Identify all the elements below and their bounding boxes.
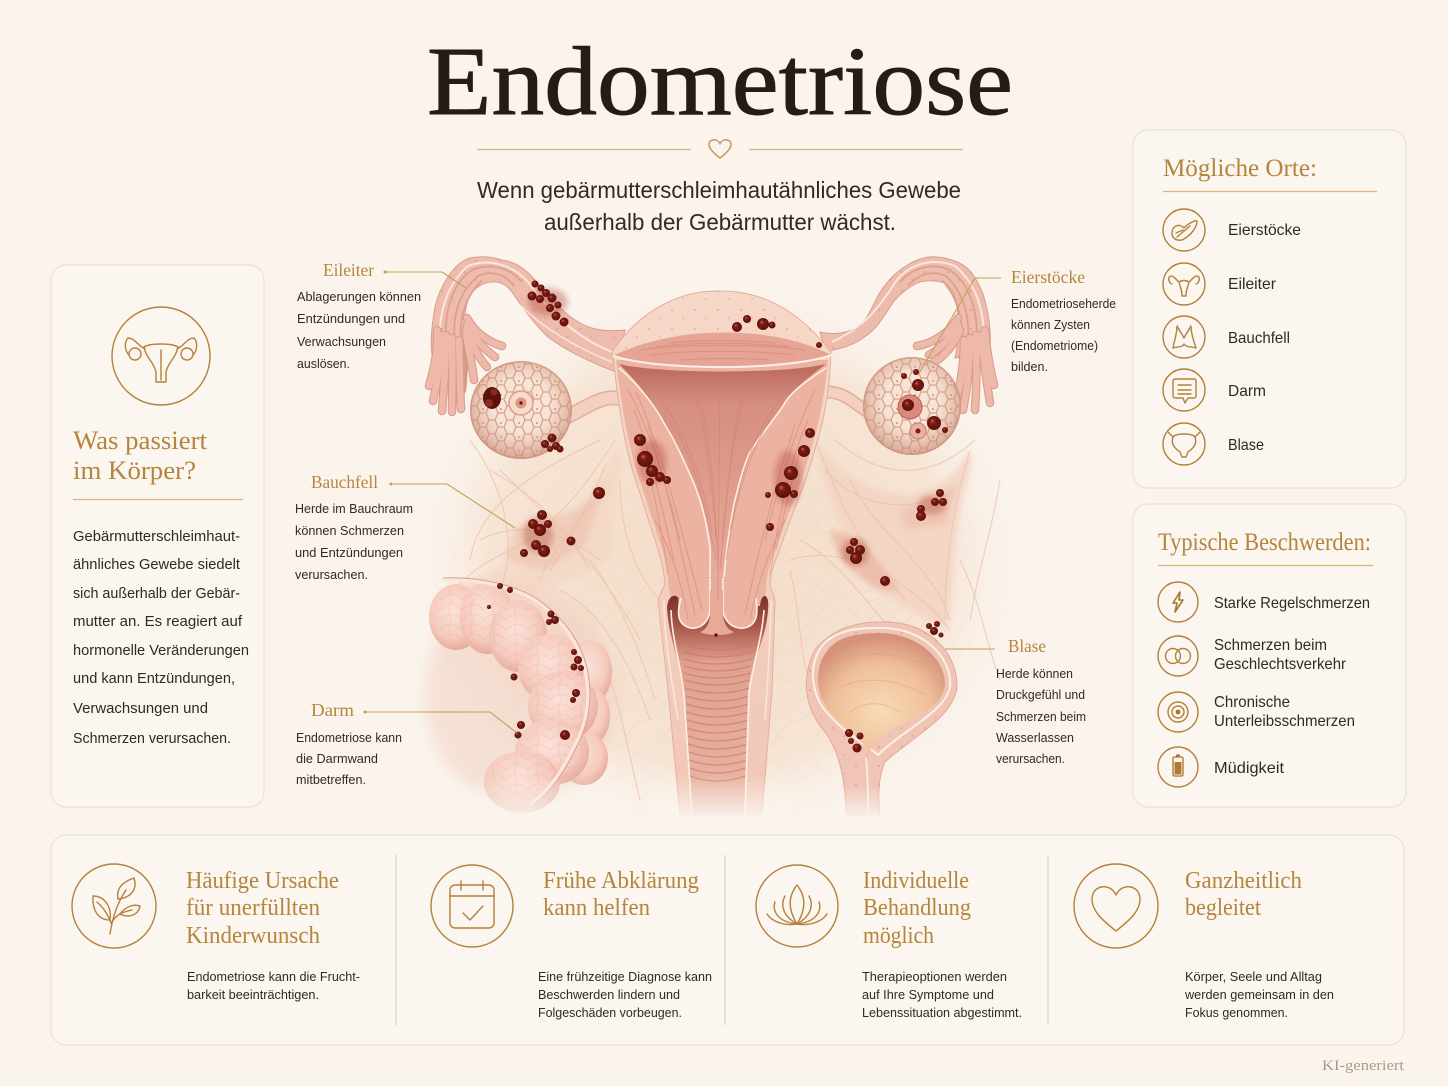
- background glow and tissue texture: [445, 349, 993, 802]
- heading: Kinderwunsch: [186, 923, 320, 949]
- callout: Darm: Darm: [311, 700, 354, 720]
- callout: Darm: die Darmwand: [296, 751, 378, 766]
- description: Lebenssituation abgestimmt.: [862, 1005, 1022, 1020]
- heading: kann helfen: [543, 895, 650, 921]
- item: Eileiter: Eileiter: [1228, 276, 1277, 293]
- endometriosis lesions: [487, 280, 948, 752]
- subtitle: [477, 177, 961, 235]
- heading: möglich: [863, 923, 934, 949]
- callout: Eierstöcke: [918, 267, 1116, 375]
- panel: typische Beschwerden: [1133, 504, 1406, 807]
- heading: [863, 868, 971, 949]
- central anatomical illustration: [422, 256, 1000, 816]
- heading: Ganzheitlich: [1185, 868, 1302, 894]
- heading: [73, 426, 208, 485]
- block: Individuelle Behandlung: [756, 865, 1022, 1020]
- wall highlight lines: [619, 368, 710, 577]
- heading: begleitet: [1185, 895, 1261, 921]
- item: Blase: [1163, 423, 1264, 465]
- footer note: KI-generiert: [1322, 1058, 1405, 1074]
- body text: mutter an. Es reagiert auf: [73, 613, 243, 630]
- callout: Eierstöcke: Eierstöcke: [1011, 267, 1085, 287]
- body text: und kann Entzündungen,: [73, 670, 235, 687]
- callout: Bauchfell: und Entzündungen: [295, 545, 403, 560]
- description: [538, 969, 712, 1020]
- heading: [186, 868, 339, 949]
- endometrial funnel: [619, 364, 826, 600]
- icon: plant: [72, 864, 156, 948]
- item: Darm: [1163, 369, 1266, 411]
- title: Endometriose: [427, 28, 1013, 135]
- item: Eileiter: [1163, 263, 1277, 305]
- heading: Mögliche Orte:: [1163, 155, 1317, 182]
- muscular wall: [616, 360, 828, 620]
- body text: ähnliches Gewebe siedelt: [73, 556, 241, 573]
- item: Chronische Unterleibsschmerzen: [1158, 692, 1355, 732]
- callout: Bauchfell: [295, 472, 515, 582]
- vagina canal: [667, 596, 768, 815]
- callout: Blase: [945, 636, 1086, 766]
- heading: [1185, 868, 1302, 921]
- callout: Eileiter: auslösen.: [297, 356, 350, 371]
- icon: heart: [1074, 864, 1158, 948]
- item: Schmerzen beim Geschlechtsverkehr: Geschlechtsverkehr: [1214, 656, 1347, 673]
- fallopian tube left: [429, 257, 625, 412]
- callout: Darm: [296, 700, 517, 787]
- body text: Verwachsungen und: [73, 700, 208, 717]
- callout: Blase: Schmerzen beim: [996, 709, 1086, 724]
- item: Schmerzen beim Geschlechtsverkehr: Schmerzen beim: [1214, 637, 1327, 654]
- body text: Gebärmutterschleimhaut-: [73, 528, 240, 545]
- title divider with heart: [477, 140, 963, 158]
- description: [187, 969, 360, 1002]
- description: Körper, Seele und Alltag: [1185, 969, 1322, 984]
- item: Blase: Blase: [1228, 437, 1264, 454]
- block: Ganzheitlich: [1074, 864, 1334, 1020]
- callout: Blase: Herde können: [996, 666, 1073, 681]
- description: Folgeschäden vorbeugen.: [538, 1005, 682, 1020]
- item: Bauchfell: Bauchfell: [1228, 330, 1290, 347]
- subtitle: Wenn gebärmutterschleimhautähnliches Gewebe: [477, 177, 961, 203]
- callout: Darm: Endometriose kann: [296, 730, 402, 745]
- callout: Eierstöcke: Endometrioseherde: [1011, 296, 1116, 311]
- description: Fokus genommen.: [1185, 1005, 1288, 1020]
- bowel: [425, 578, 630, 820]
- ovary right: [863, 357, 961, 455]
- callout: Eileiter: Verwachsungen: [297, 334, 386, 349]
- item: Bauchfell: [1163, 316, 1290, 358]
- heading: für unerfüllten: [186, 895, 320, 921]
- callout: Bauchfell: können Schmerzen: [295, 523, 404, 538]
- heading: [543, 868, 699, 921]
- description: barkeit beeinträchtigen.: [187, 987, 319, 1002]
- heading: im Körper?: [73, 456, 196, 485]
- callout: Bauchfell: Bauchfell: [311, 472, 378, 492]
- outer body and vaginal wall: [612, 291, 831, 815]
- description: werden gemeinsam in den: [1184, 987, 1334, 1002]
- callout: Eileiter: Entzündungen und: [297, 311, 405, 326]
- icon: lotus: [756, 865, 838, 947]
- heading: Frühe Abklärung: [543, 868, 699, 894]
- item: Müdigkeit: Müdigkeit: [1214, 760, 1285, 777]
- fallopian tube right: [820, 257, 994, 410]
- description: Endometriose kann die Frucht-: [187, 969, 360, 984]
- callout: Eileiter: Ablagerungen können: [297, 289, 421, 304]
- callout: Blase: Blase: [1008, 636, 1046, 656]
- uterus body: [612, 291, 832, 820]
- muscle streaks: [628, 375, 815, 620]
- item: Eierstöcke: [1163, 209, 1301, 251]
- panel: bottom info bar: [51, 835, 1404, 1045]
- item: Eierstöcke: Eierstöcke: [1228, 222, 1301, 239]
- item: Müdigkeit: [1158, 747, 1285, 787]
- callout: Blase: verursachen.: [996, 751, 1065, 766]
- item: Starke Regelschmerzen: Starke Regelschmerzen: [1214, 595, 1370, 612]
- icon: uterus: [112, 307, 210, 405]
- callout: Bauchfell: Herde im Bauchraum: [295, 501, 413, 516]
- callout: Blase: Druckgefühl und: [996, 687, 1085, 702]
- body text: hormonelle Veränderungen: [73, 642, 249, 659]
- heading: Individuelle: [863, 868, 969, 894]
- fimbriae: [429, 318, 502, 412]
- heading: Behandlung: [863, 895, 971, 921]
- heading: Was passiert: [73, 426, 208, 455]
- peritoneum web tissue left: [445, 440, 660, 800]
- callout: Blase: Wasserlassen: [996, 730, 1074, 745]
- callout: Eierstöcke: (Endometriome): [1011, 338, 1098, 353]
- ligaments to ovaries: [565, 392, 868, 418]
- callout: Eileiter: [297, 260, 466, 371]
- ovary left: [470, 361, 572, 459]
- item: Darm: Darm: [1228, 383, 1266, 400]
- description: auf Ihre Symptome und: [862, 987, 994, 1002]
- heading: Typische Beschwerden:: [1158, 529, 1371, 556]
- callout: Eierstöcke: können Zysten: [1011, 317, 1090, 332]
- description: [1184, 969, 1334, 1020]
- description: Beschwerden lindern und: [538, 987, 680, 1002]
- bladder: [806, 622, 957, 820]
- panel: mögliche Orte: [1133, 130, 1406, 488]
- peritoneum web tissue right: [790, 440, 1000, 680]
- subtitle: außerhalb der Gebärmutter wächst.: [544, 209, 896, 235]
- fimbriae: [917, 318, 994, 410]
- panel: was passiert im Körper: [51, 265, 264, 807]
- description: Therapieoptionen werden: [862, 969, 1007, 984]
- callout: Bauchfell: verursachen.: [295, 567, 368, 582]
- item: Schmerzen beim Geschlechtsverkehr: [1158, 636, 1347, 676]
- cavity lens top: [613, 332, 832, 367]
- icon: calendar: [431, 865, 513, 947]
- body text: sich außerhalb der Gebär-: [73, 585, 240, 602]
- item: Chronische Unterleibsschmerzen: Chronische: [1214, 694, 1290, 711]
- callout: Eierstöcke: bilden.: [1011, 359, 1048, 374]
- body text: Schmerzen verursachen.: [73, 730, 231, 747]
- description: [862, 969, 1022, 1020]
- item: Starke Regelschmerzen: [1158, 582, 1370, 622]
- item: Chronische Unterleibsschmerzen: Unterleibsschmerzen: [1214, 713, 1355, 730]
- heading: Häufige Ursache: [186, 868, 339, 894]
- callout: Eileiter: Eileiter: [323, 260, 374, 280]
- description: Eine frühzeitige Diagnose kann: [538, 969, 712, 984]
- body text: [73, 528, 249, 747]
- red stain halos around lesions: [523, 288, 946, 566]
- cervix lobes: [676, 575, 710, 628]
- block: Frühe Abklärung: [431, 865, 712, 1020]
- block: Kinderwunsch: [72, 864, 360, 1002]
- callout: Darm: mitbetreffen.: [296, 772, 366, 787]
